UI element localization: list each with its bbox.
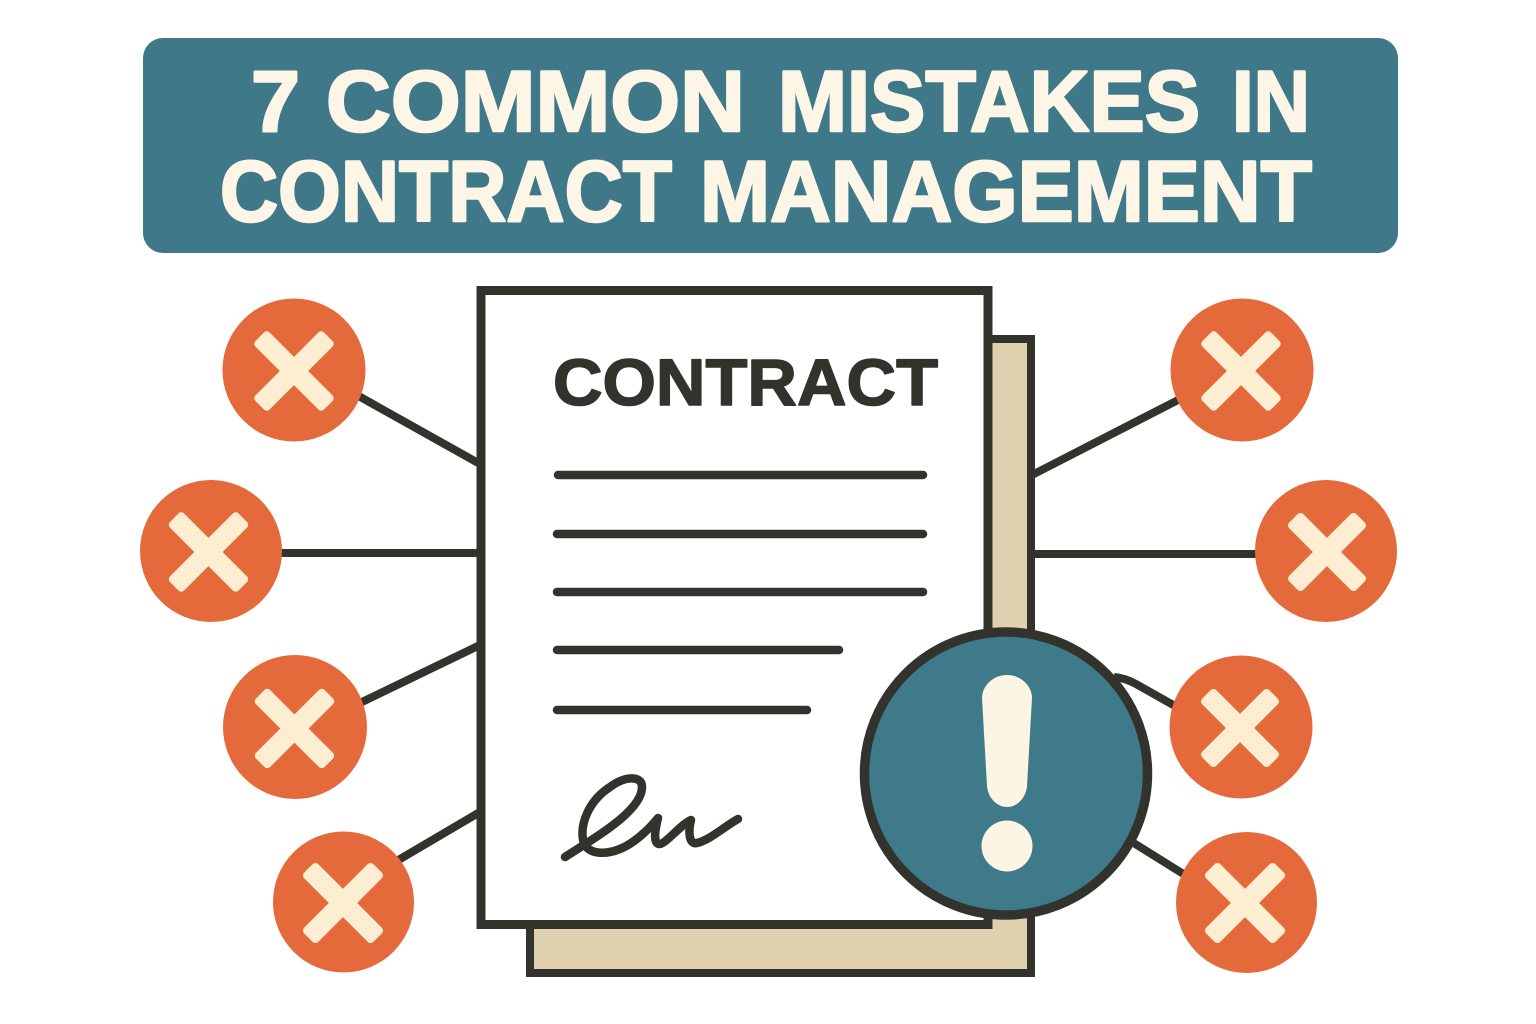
error marker 2	[140, 480, 282, 622]
document text lines	[557, 475, 923, 710]
connector lines	[278, 394, 1260, 875]
exclamation mark	[982, 675, 1032, 807]
title text line 1: COMMON	[326, 54, 745, 150]
title text line 1: MISTAKES	[778, 54, 1200, 150]
error marker 5	[1170, 298, 1314, 442]
warning badge	[864, 632, 1148, 915]
title banner	[143, 38, 1398, 253]
title text line 1	[251, 54, 1310, 150]
signature	[565, 778, 738, 857]
title text line 1: 7	[251, 54, 300, 150]
title text line 1: IN	[1232, 54, 1310, 150]
document heading: CONTRACT	[553, 345, 938, 419]
back page	[530, 339, 1031, 973]
error marker 7	[1170, 656, 1312, 798]
error marker 4	[273, 832, 414, 972]
error marker 6	[1255, 480, 1397, 622]
title text line 2	[220, 144, 1312, 240]
title text line 2: CONTRACT	[220, 144, 672, 240]
contract document	[481, 290, 988, 924]
title text line 2: MANAGEMENT	[700, 144, 1312, 240]
error markers	[140, 298, 1397, 973]
error marker 1	[222, 298, 366, 442]
error marker 8	[1176, 832, 1317, 973]
error marker 3	[223, 655, 367, 799]
